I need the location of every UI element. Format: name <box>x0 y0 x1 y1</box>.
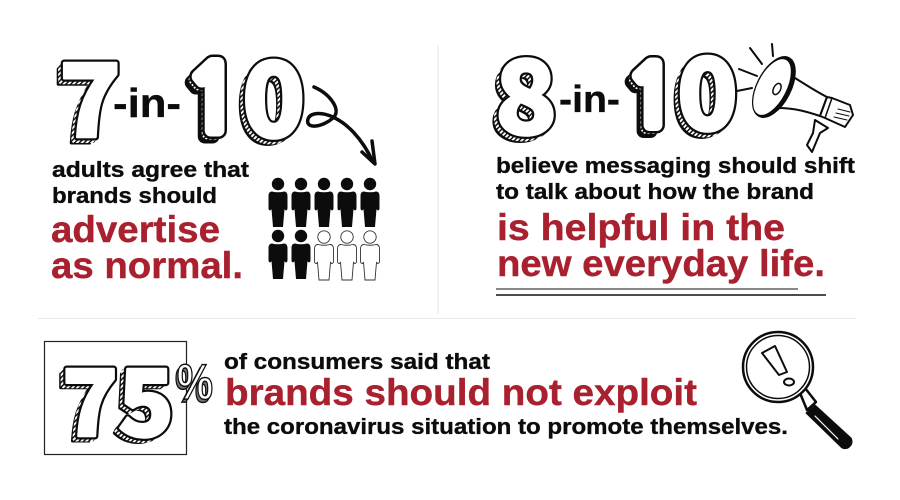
text: -in-: -in- <box>113 80 181 126</box>
big number: 75: 7 <box>56 335 112 468</box>
big number: 7: 7 <box>53 26 115 173</box>
big number: 10: 0 <box>674 17 735 162</box>
panel: 8-in-10 believe: to talk about how the brand <box>496 179 814 204</box>
big number: 10: 0 <box>242 16 305 167</box>
big number: 75: 7 <box>62 330 118 463</box>
text: -in-: -in- <box>559 79 620 121</box>
big number: 10: 1 <box>626 57 676 139</box>
panel: 8-in-10 believe <box>489 14 856 295</box>
big number: 10: 0 <box>677 14 738 159</box>
percent sign: % <box>175 357 211 413</box>
big number: 10: 1 <box>185 54 240 145</box>
big number: 10: 0 <box>239 19 302 170</box>
big number: 8: 8 <box>495 17 557 164</box>
body text: believe messaging: believe messaging should shift <box>496 153 856 178</box>
body text: of consumers: of consumers said that <box>224 349 491 374</box>
big number: 10: 0 <box>677 14 738 159</box>
big number: 10 <box>620 14 738 165</box>
big number: 8: 8 <box>492 20 554 167</box>
icon: magnifying glass <box>743 332 852 449</box>
big number: 10: 1 <box>626 57 676 139</box>
big number: 75: 5 <box>118 330 174 463</box>
big number: 75 <box>56 330 174 468</box>
big number: 75: 5 <box>118 330 174 463</box>
big number: 75: 7 <box>59 332 115 466</box>
big number: 10: 0 <box>236 22 299 173</box>
pictogram: 7 of 10 people <box>268 178 380 280</box>
panel: 75% of consumers <box>44 330 852 468</box>
big number: 10: 1 <box>623 60 673 142</box>
highlight: advertise as normal: advertise <box>51 209 220 250</box>
big number: 10: 1 <box>620 63 670 145</box>
big number: 10: 1 <box>182 57 237 148</box>
highlight: brands should not exploit: brands should not exploit <box>225 372 697 413</box>
big number: 7: 7 <box>59 20 121 167</box>
panel: 8-in-10 believe: new everyday life. <box>497 243 825 284</box>
big number: 10: 0 <box>242 16 305 167</box>
big number: 8: 8 <box>495 17 557 164</box>
percent sign: % <box>177 354 213 410</box>
big number: 8: 8 <box>489 23 551 170</box>
panel: 7-in-10 adults <box>51 16 380 286</box>
big number: 7: 7 <box>56 23 118 170</box>
big number: 75: 7 <box>62 330 118 463</box>
icon: megaphone <box>737 44 853 152</box>
body text: adults agree: adults agree that <box>52 157 250 182</box>
frame around number <box>44 342 186 454</box>
big number: 10: 0 <box>671 20 732 165</box>
panel: 7-in-10 adults: as normal. <box>51 245 243 286</box>
big number: 10 <box>179 16 305 173</box>
highlight: is helpful: is helpful in the <box>497 207 785 248</box>
body text: coronavirus: the coronavirus situation to promote themselves. <box>224 414 788 439</box>
big number: 10: 1 <box>185 54 240 145</box>
big number: 7: 7 <box>59 20 121 167</box>
big number: 75: 5 <box>115 332 171 466</box>
sketched underline <box>496 289 826 295</box>
big number: 10: 1 <box>179 60 234 151</box>
big number: 75: 5 <box>112 335 168 468</box>
panel: 7-in-10 adults: brands should <box>52 183 217 208</box>
arrow: looping down to people <box>308 87 375 164</box>
